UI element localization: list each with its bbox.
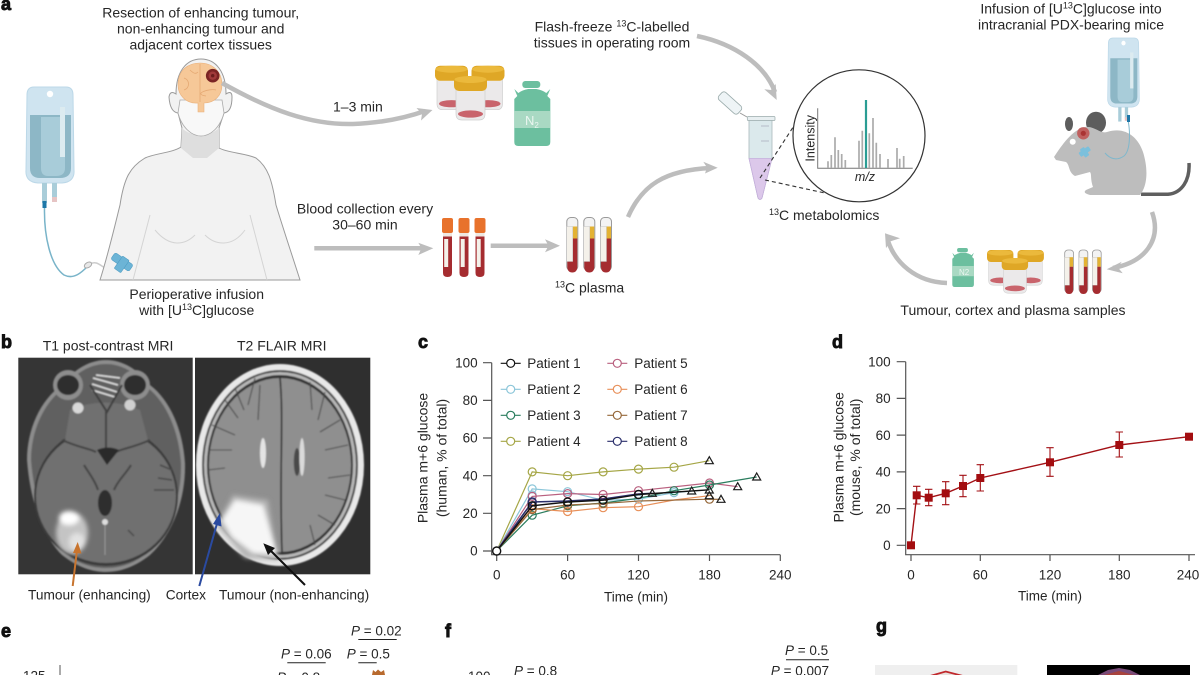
image: T1 MRI (18, 358, 193, 574)
y axis title: Plasma m+6 glucose (414, 393, 430, 523)
icon: bottom samples (952, 248, 1101, 294)
end-of-infusion triangle markers (648, 457, 761, 502)
y axis title: (human, % of total) (434, 399, 450, 517)
text: 13C plasma: C plasma (565, 280, 624, 296)
x tick labels: 0 (493, 567, 500, 582)
arrow: flash-freeze to tube (697, 36, 777, 100)
icon: butterfly needle (111, 252, 133, 273)
mass spectrum inset: m/z (855, 170, 876, 184)
axes (483, 363, 780, 561)
arrow: body to blood tubes (314, 243, 433, 255)
text: resection: non-enhancing tumour and (117, 21, 284, 37)
text: blood collection: Blood collection every (297, 201, 433, 217)
text: perioperative infusion (129, 286, 264, 318)
line: patient 3 (497, 477, 757, 551)
text: flash-freeze: C-labelled (626, 18, 689, 34)
text: resection (102, 4, 299, 53)
legend: Patient 4 (527, 434, 581, 449)
y tick labels: 20 (463, 506, 478, 521)
text: 1–3 min: 1–3 min (333, 99, 383, 115)
mass spectrum inset: Intensity (803, 114, 817, 162)
text: resection: Resection of enhancing tumour, (102, 4, 299, 20)
x tick labels: 120 (627, 567, 650, 582)
text: perioperative infusion: C]glucose (192, 302, 254, 318)
line: patient 8 (497, 493, 652, 551)
y tick labels: 0 (470, 544, 478, 559)
y tick labels: 60 (876, 428, 891, 443)
legend (501, 356, 688, 449)
icon: tissue jars (435, 66, 504, 120)
orange violin top (372, 670, 385, 675)
icon: mouse (1054, 112, 1189, 195)
p-value: f 0.5: P = 0.5 (785, 643, 828, 658)
panel letter g: g (876, 616, 887, 636)
legend: Patient 5 (634, 356, 688, 371)
panel e: partial chart, cropped (1, 621, 402, 675)
grey tissue image (875, 665, 1017, 675)
icon: nitrogen flask: 2 (534, 121, 539, 130)
line: patient 4 (497, 461, 709, 551)
icon: nitrogen flask (514, 81, 550, 146)
legend: Patient 7 (634, 408, 688, 423)
arrow: mouse to samples (1107, 212, 1155, 273)
dashed zoom lines (760, 112, 834, 195)
y tick labels: 40 (463, 468, 478, 483)
text: 13C metabolomics: C metabolomics (779, 207, 879, 223)
text: infusion into mice: 13 (1063, 0, 1073, 10)
y axis title: Plasma m+6 glucose (830, 392, 846, 522)
x tick labels: 180 (698, 567, 721, 582)
line: patient 6 (497, 496, 709, 551)
mass spectrum inset (793, 70, 925, 202)
p-value: 0.02: P = 0.02 (351, 624, 402, 639)
x tick labels (907, 567, 1199, 582)
label: tumour enhancing: Tumour (enhancing) (28, 588, 151, 602)
line: patient 7 (497, 495, 721, 551)
heading: T2: T2 FLAIR MRI (237, 338, 326, 354)
p-value: 0.5: P = 0.5 (347, 646, 390, 661)
line: patient 5 (497, 479, 738, 551)
icon: nitrogen flask: N (525, 113, 534, 128)
icon: infusion bag (26, 87, 74, 203)
data markers (907, 433, 1193, 549)
x axis title: Time (min) (1018, 589, 1082, 604)
text: infusion into mice (978, 0, 1164, 32)
y tick labels: 80 (463, 393, 478, 408)
x tick labels: 60 (973, 567, 988, 582)
data line (911, 437, 1189, 545)
y axis title: (mouse, % of total) (847, 399, 863, 516)
black imaging panel (1047, 665, 1190, 675)
x tick labels: 120 (1039, 567, 1061, 582)
text: 13C plasma: 13 (555, 280, 565, 290)
y tick labels: 100 (868, 354, 891, 369)
heading: T1: T1 post-contrast MRI (43, 338, 173, 354)
y tick labels: 40 (876, 465, 891, 480)
label: cortex: Cortex (166, 588, 206, 602)
y tick labels: 60 (463, 431, 478, 446)
panel letter c: c (418, 332, 428, 352)
legend: Patient 1 (527, 356, 581, 371)
legend: Patient 6 (634, 382, 688, 397)
icon: bottom samples: N2 (959, 268, 970, 277)
arrow: brain to jars (222, 83, 432, 124)
text: blood collection: 30–60 min (332, 217, 398, 233)
y tick labels: 0 (883, 538, 891, 553)
text: infusion into mice: intracranial PDX-bearing mice (978, 16, 1164, 32)
arrow: tumour non-enhancing (263, 543, 305, 585)
icon: human torso and head (100, 59, 300, 280)
panel letter b: b (1, 332, 12, 352)
y axis stub (59, 665, 61, 675)
x tick labels: 240 (1177, 567, 1199, 582)
arrow: plasma to metabolomics (628, 162, 718, 217)
arrow: tumour enhancing (73, 542, 82, 586)
text: perioperative infusion: with [U (139, 302, 182, 318)
text: perioperative infusion: Perioperative infusion (129, 286, 264, 302)
panel g: partial images, cropped (875, 616, 1190, 675)
y axis title (414, 393, 450, 523)
legend: Patient 2 (527, 382, 581, 397)
infusion tube and connector (42, 201, 120, 277)
image: T2 FLAIR MRI (195, 358, 370, 574)
x tick labels: 180 (1108, 567, 1131, 582)
text: infusion into mice: Infusion of [U (980, 0, 1063, 16)
icon: plasma tubes (567, 218, 612, 272)
arrow: blood tubes to plasma (491, 239, 560, 252)
icon: small infusion bag (1108, 38, 1139, 122)
icon: microcentrifuge tube (717, 91, 775, 200)
text: flash-freeze: Flash-freeze (535, 18, 612, 34)
text: flash-freeze: 13 (616, 18, 626, 28)
text: perioperative infusion: 13 (182, 302, 192, 312)
arrow: samples to metabolomics (885, 233, 947, 283)
line: patient 1 (493, 490, 709, 555)
panel d: mouse plasma line chart (830, 332, 1199, 604)
text: samples caption: Tumour, cortex and plasma samples (900, 302, 1126, 318)
x tick labels: 60 (560, 567, 575, 582)
y axis title (830, 392, 863, 522)
p-value: 0.06: P = 0.06 (281, 646, 332, 661)
text: infusion into mice: C]glucose into (1073, 0, 1162, 16)
panel letter f: f (445, 621, 452, 641)
text: blood collection (297, 201, 433, 233)
y tick labels: 100 (455, 355, 478, 370)
y tick labels: 20 (876, 501, 891, 516)
text: resection: adjacent cortex tissues (129, 37, 272, 53)
error bars (913, 432, 1123, 506)
text: 13C metabolomics: 13 (769, 207, 779, 217)
axes (897, 362, 1195, 561)
panel b: MRI images (1, 332, 370, 602)
icon: blood tubes (442, 218, 486, 277)
panel c: human plasma line chart (414, 332, 792, 605)
x tick labels: 240 (769, 567, 792, 582)
label: tumour non-enhancing: Tumour (non-enhancing) (219, 588, 369, 602)
legend: Patient 8 (634, 434, 688, 449)
y tick labels (868, 354, 891, 553)
panel a: workflow schematic (1, 0, 1189, 318)
panel letter d: d (832, 332, 843, 352)
y tick labels: 80 (876, 391, 891, 406)
text: flash-freeze (534, 18, 690, 51)
icon: brain with tumour (178, 63, 222, 112)
y tick labels (455, 355, 478, 559)
panel f: partial chart, cropped (445, 621, 829, 675)
x tick labels (493, 567, 792, 582)
arrow: cortex (199, 513, 222, 586)
line: patient 2 (497, 485, 692, 551)
x tick labels: 0 (907, 567, 915, 582)
panel letter e: e (1, 621, 11, 641)
text: flash-freeze: tissues in operating room (534, 35, 690, 51)
x axis title: Time (min) (604, 590, 668, 605)
legend: Patient 3 (527, 408, 581, 423)
